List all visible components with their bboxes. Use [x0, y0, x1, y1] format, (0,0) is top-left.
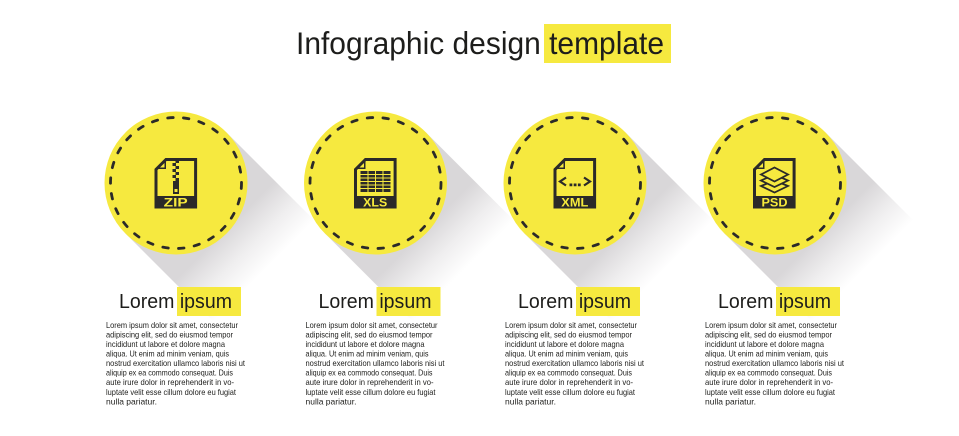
text block: nulla pariatur. [505, 397, 556, 406]
text block: Lorem ipsum dolor sit amet, consectetur [705, 321, 837, 330]
panel: XML [504, 112, 716, 406]
panel: XLS [304, 112, 516, 406]
text block [106, 321, 246, 406]
text block: luptate velit esse cillum dolore eu fugiat [306, 388, 436, 397]
long shadow [126, 132, 316, 324]
icon: PSD file [753, 159, 796, 210]
text block: aliqua. Ut enim ad minim veniam, quis [306, 350, 428, 359]
icon: ZIP file [154, 159, 197, 210]
dashed ring [510, 118, 640, 248]
text block [505, 321, 645, 406]
text block: incididunt ut labore et dolore magna [106, 340, 225, 349]
heading: Lorem ipsum [318, 291, 432, 313]
yellow circle [504, 112, 646, 254]
text block: adipiscing elit, sed do eiusmod tempor [505, 330, 632, 340]
text block: incididunt ut labore et dolore magna [705, 340, 824, 349]
yellow circle [304, 112, 447, 254]
text block: Lorem ipsum dolor sit amet, consectetur [106, 321, 238, 330]
text block: nostrud exercitation ullamco laboris nisi ut [705, 359, 845, 368]
text block: aliquip ex ea commodo consequat. Duis [505, 369, 632, 378]
panel: PSD [704, 112, 916, 406]
long shadow [524, 132, 716, 324]
text block: nostrud exercitation ullamco laboris nisi ut [505, 359, 645, 368]
text block: adipiscing elit, sed do eiusmod tempor [705, 330, 832, 340]
heading: Lorem ipsum [119, 291, 232, 313]
text block: aute irure dolor in reprehenderit in vo- [705, 378, 833, 387]
text block: nulla pariatur. [106, 397, 157, 406]
long shadow [724, 132, 916, 324]
icon: XLS file [354, 159, 396, 210]
text block: aute irure dolor in reprehenderit in vo- [306, 378, 434, 387]
text block [306, 321, 445, 406]
text block: nulla pariatur. [306, 397, 356, 406]
text block: aliquip ex ea commodo consequat. Duis [106, 369, 233, 378]
text block: aute irure dolor in reprehenderit in vo- [505, 378, 633, 387]
icon: XML file [554, 159, 596, 210]
icon: XML file: XML [561, 198, 588, 210]
heading: Lorem ipsum [718, 291, 831, 313]
icon: PSD file: PSD [762, 198, 788, 210]
icon: ZIP file: ZIP [164, 198, 188, 210]
heading: Lorem ipsum [518, 291, 631, 313]
text block: aliqua. Ut enim ad minim veniam, quis [705, 350, 828, 359]
text block: adipiscing elit, sed do eiusmod tempor [106, 330, 233, 340]
text block: aliqua. Ut enim ad minim veniam, quis [106, 350, 229, 359]
text block: Lorem ipsum dolor sit amet, consectetur [306, 321, 438, 330]
yellow circle [104, 112, 248, 254]
text block: luptate velit esse cillum dolore eu fugiat [505, 388, 636, 397]
text block [705, 321, 845, 406]
text block: aliquip ex ea commodo consequat. Duis [705, 369, 832, 378]
text block: aliqua. Ut enim ad minim veniam, quis [505, 350, 628, 359]
text block: nulla pariatur. [705, 397, 756, 406]
text block: Lorem ipsum dolor sit amet, consectetur [505, 321, 637, 330]
dashed ring [310, 118, 441, 248]
yellow circle [704, 112, 846, 254]
icon: XLS file: XLS [363, 198, 388, 210]
panel: ZIP [104, 112, 316, 406]
long shadow [325, 132, 516, 324]
text block: aute irure dolor in reprehenderit in vo- [106, 378, 234, 387]
text block: aliquip ex ea commodo consequat. Duis [306, 369, 432, 378]
dashed ring [110, 118, 242, 248]
text block: luptate velit esse cillum dolore eu fugiat [705, 388, 836, 397]
text block: luptate velit esse cillum dolore eu fugiat [106, 388, 237, 397]
dashed ring [710, 118, 840, 248]
text block: adipiscing elit, sed do eiusmod tempor [306, 330, 433, 340]
text block: incididunt ut labore et dolore magna [306, 340, 425, 349]
text block: incididunt ut labore et dolore magna [505, 340, 624, 349]
text block: nostrud exercitation ullamco laboris nisi ut [306, 359, 445, 368]
title: Infographic design template [296, 25, 664, 61]
text block: nostrud exercitation ullamco laboris nisi ut [106, 359, 246, 368]
